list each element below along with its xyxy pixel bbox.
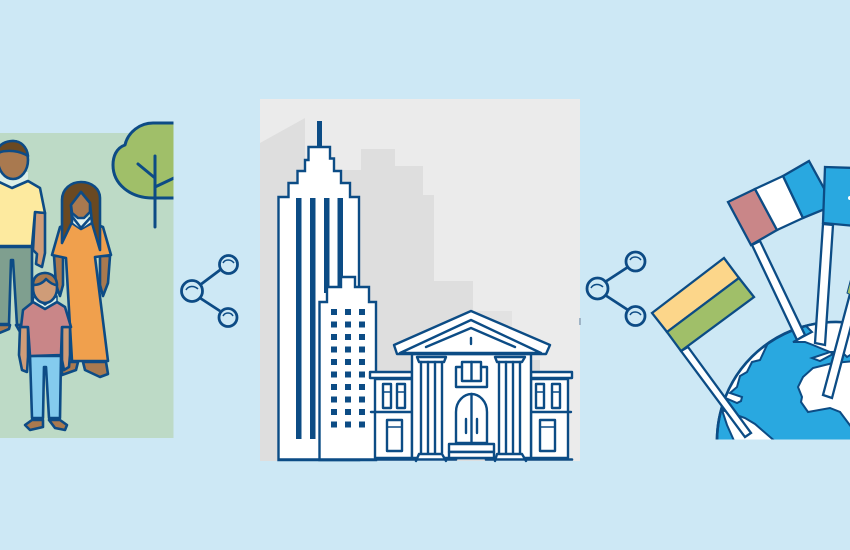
left wing	[375, 379, 412, 458]
tower body	[278, 147, 359, 460]
flag three emblem	[848, 196, 850, 200]
flag two white stripe	[755, 176, 803, 230]
boy arms	[19, 327, 70, 372]
man trousers	[0, 247, 32, 325]
flag four: partial	[823, 278, 850, 398]
steps	[449, 444, 494, 452]
boy trousers	[30, 356, 61, 418]
panel: globe and flags	[650, 159, 850, 440]
globe and flags artwork	[650, 159, 850, 440]
book emblem	[456, 362, 487, 387]
globe	[716, 320, 850, 440]
flag two red stripe	[728, 189, 777, 245]
flag three banner	[823, 167, 850, 226]
boy head	[33, 273, 57, 303]
flag one: yellow and green	[652, 258, 754, 437]
woman dress	[52, 223, 111, 361]
pediment roof	[394, 311, 550, 354]
background skyline	[260, 118, 540, 461]
boy hair	[33, 273, 57, 285]
flag four banner	[847, 278, 850, 295]
right wing	[531, 379, 568, 458]
flag three: blue	[815, 167, 850, 345]
central hall	[412, 354, 531, 458]
tower antenna	[317, 121, 322, 148]
man head	[0, 141, 28, 179]
flag one green band	[667, 278, 754, 351]
woman hair	[62, 182, 100, 250]
woman collar	[71, 215, 90, 228]
tower stripes	[296, 198, 343, 439]
left columns	[417, 357, 446, 362]
background skyline far step	[473, 311, 512, 360]
flag two blue stripe	[783, 161, 826, 218]
front block	[320, 277, 376, 460]
edge speck	[579, 318, 581, 325]
block windows	[331, 309, 365, 428]
man neck	[0, 172, 28, 186]
boy shirt	[21, 302, 71, 356]
globe sphere	[716, 320, 850, 440]
civic building	[279, 311, 572, 461]
man shirt	[0, 181, 45, 246]
panel background: green park	[0, 133, 174, 438]
woman arms	[54, 256, 110, 296]
people and tree artwork	[0, 123, 180, 430]
woman shoes	[62, 362, 108, 377]
woman	[52, 182, 111, 377]
panel: city	[260, 99, 581, 461]
man	[0, 141, 45, 334]
flag three pole	[815, 224, 833, 345]
flag one pole	[681, 347, 751, 437]
man hair	[0, 141, 28, 156]
continents	[722, 323, 850, 440]
boy collar	[33, 296, 57, 309]
panel: family	[0, 123, 180, 438]
boy	[19, 273, 71, 430]
icon: share left	[182, 256, 238, 326]
woman neck	[73, 220, 90, 228]
flag one yellow band	[652, 258, 739, 332]
globe outline	[716, 320, 842, 440]
flag four pole	[823, 290, 850, 398]
flag two pole	[752, 241, 805, 340]
arched door	[456, 394, 487, 443]
icon: share right	[587, 252, 645, 326]
man shoes	[0, 324, 20, 334]
woman face	[71, 192, 90, 218]
flag two: tricolour	[728, 161, 826, 340]
right columns	[495, 357, 525, 362]
ground line	[279, 458, 572, 461]
icon: tree	[113, 123, 180, 227]
man arm	[33, 212, 45, 267]
illustration canvas	[0, 99, 850, 462]
panel background: grey square	[260, 99, 580, 461]
boy shoes	[25, 420, 67, 430]
tower	[278, 121, 376, 460]
